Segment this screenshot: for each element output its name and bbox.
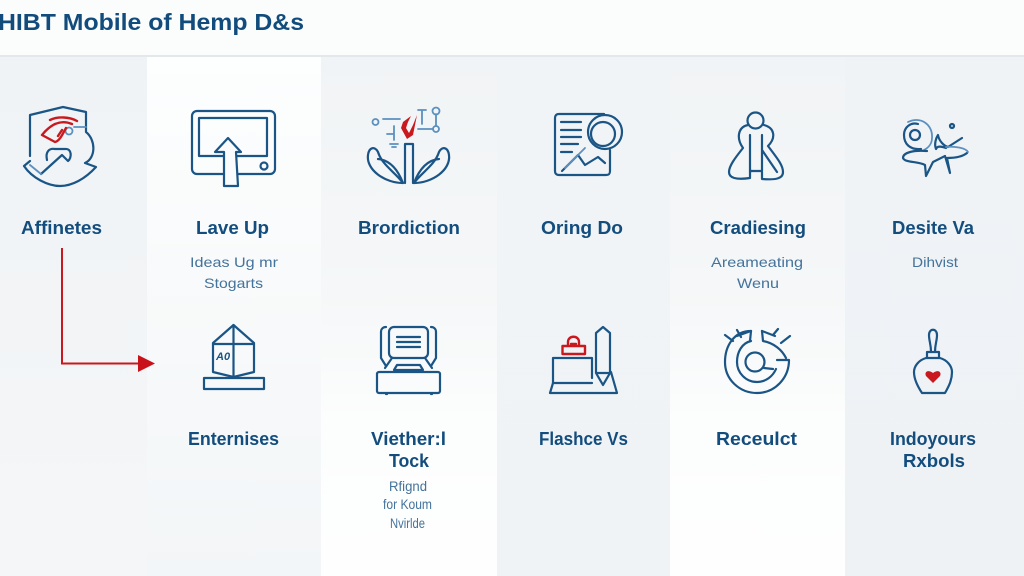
heading: Indoyours Rxbols	[890, 429, 976, 471]
heading: Indoyours Rxbols: Rxbols	[903, 451, 965, 471]
text: Ideas Ug mr Stogarts: Ideas Ug mr	[190, 254, 278, 270]
title: HIBT Mobile of Hemp D&s	[0, 9, 304, 35]
heading: Cradiesing: Cradiesing	[710, 218, 806, 238]
icon: desktop terminal	[377, 327, 440, 394]
text: Dihvist: Dihvist	[912, 254, 958, 270]
icon: box on a base: A0	[215, 351, 231, 363]
icon: hands with circuit and check	[368, 108, 449, 183]
text: Ideas Ug mr Stogarts: Stogarts	[204, 275, 263, 291]
panel: Viether:l Tock	[371, 327, 446, 531]
heading: Desite Va: Desite Va	[892, 218, 975, 238]
heading: Brordiction: Brordiction	[358, 218, 460, 238]
icon: figure	[729, 112, 783, 179]
icon: tablet with up arrow	[192, 111, 275, 186]
text: Rfignd for Koum Nvirlde: for Koum	[383, 496, 432, 512]
panel: Cradiesing	[710, 112, 806, 291]
panel: Desite Va	[892, 120, 975, 270]
panel: Affinetes	[21, 107, 102, 238]
heading: Affinetes: Affinetes	[21, 218, 102, 238]
panel: Flashce Vs	[539, 327, 628, 449]
text: Areameating Wenu	[711, 254, 803, 291]
text: Areameating Wenu: Areameating	[711, 254, 803, 270]
icon: spiral with rays	[725, 329, 790, 393]
arrow: red elbow connector	[62, 248, 155, 372]
panel: Enternises	[188, 325, 279, 449]
panel: Receulct	[716, 329, 797, 449]
heading: Viether:l Tock: Viether:l	[371, 429, 446, 449]
heading: Viether:l Tock: Tock	[389, 451, 430, 471]
panel: Brordiction	[358, 108, 460, 238]
icon: star plane with orbit	[903, 120, 968, 176]
header band	[0, 0, 1024, 57]
icon: document with magnifier and chart	[555, 114, 622, 175]
panel: Lave Up	[190, 111, 278, 291]
panel: Indoyours Rxbols	[890, 330, 976, 471]
text: Ideas Ug mr Stogarts	[190, 254, 278, 291]
heading: Lave Up: Lave Up	[196, 218, 269, 238]
text: Rfignd for Koum Nvirlde: Rfignd	[389, 478, 427, 494]
icon: shield with hand	[24, 107, 96, 186]
heading: Enternises: Enternises	[188, 429, 279, 449]
text: Rfignd for Koum Nvirlde	[383, 478, 432, 531]
icon: perfume bottle with heart	[914, 330, 952, 393]
text: Areameating Wenu: Wenu	[737, 275, 779, 291]
heading: Indoyours Rxbols: Indoyours	[890, 429, 976, 449]
heading: Receulct: Receulct	[716, 429, 797, 449]
text: Rfignd for Koum Nvirlde: Nvirlde	[390, 515, 425, 531]
heading: Oring Do: Oring Do	[541, 218, 623, 238]
heading: Flashce Vs: Flashce Vs	[539, 429, 628, 449]
heading: Viether:l Tock	[371, 429, 446, 471]
icon: laptop with lock and pencil	[550, 327, 617, 393]
panel: Oring Do	[541, 114, 623, 238]
